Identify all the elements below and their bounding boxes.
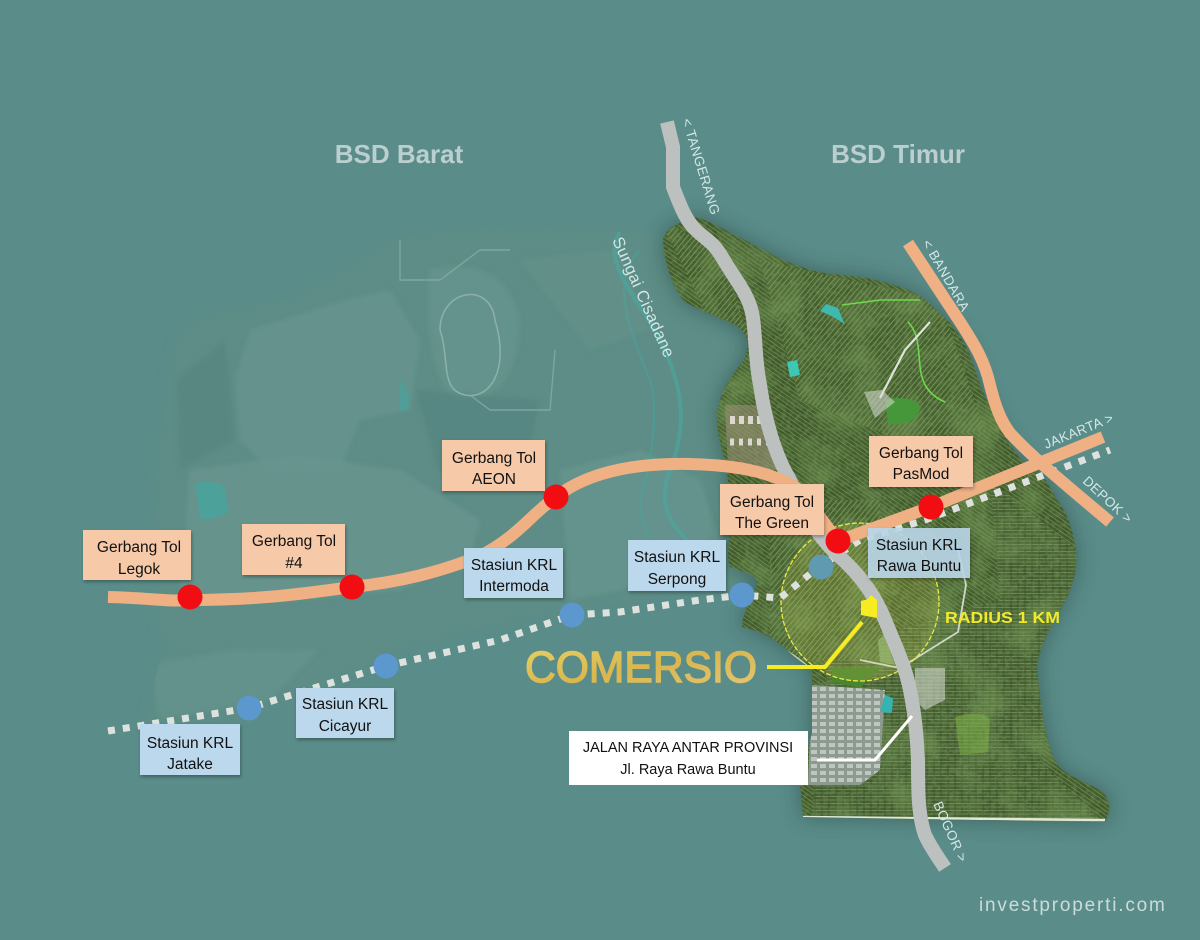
road: Tangerang to Bogor grey road xyxy=(667,122,945,868)
toll gate: PasMod: PasMod xyxy=(893,466,949,483)
callout: Jalan Raya Antar Provinsi xyxy=(569,731,808,785)
station: Rawa Buntu xyxy=(808,528,970,580)
toll gate: Legok: Gerbang Tol xyxy=(97,539,181,556)
toll gate: Legok xyxy=(83,530,202,610)
station: Cicayur: Cicayur xyxy=(319,718,371,735)
callout: Jalan Raya Antar Provinsi: Jl. Raya Rawa Buntu xyxy=(620,762,756,778)
road: toll road Bandara xyxy=(908,243,1110,522)
toll gate: #4 xyxy=(242,524,364,600)
toll gate: #4: #4 xyxy=(285,555,303,572)
toll gate: PasMod: Gerbang Tol xyxy=(879,445,963,462)
station: Serpong: Serpong xyxy=(648,571,706,588)
station: Jatake: Stasiun KRL xyxy=(147,735,233,752)
station: Rawa Buntu: Stasiun KRL xyxy=(876,537,962,554)
label: Jakarta direction: JAKARTA > xyxy=(1042,410,1116,452)
toll gate: The Green: Gerbang Tol xyxy=(730,494,814,511)
icon: project site marker xyxy=(861,595,877,618)
toll gate: PasMod xyxy=(869,436,973,520)
station: Cicayur xyxy=(296,654,398,738)
pointer: Comersio to project site xyxy=(767,622,862,667)
toll gate: The Green xyxy=(720,484,850,554)
station: Jatake: Jatake xyxy=(167,756,213,773)
station: Intermoda: Intermoda xyxy=(479,578,549,595)
panel: BSD Timur land (detailed green east area) xyxy=(650,200,1120,840)
station: Intermoda: Stasiun KRL xyxy=(471,557,557,574)
station: Serpong xyxy=(628,540,754,608)
station: Rawa Buntu: Rawa Buntu xyxy=(877,558,961,575)
watermark: investproperti.com xyxy=(979,895,1167,916)
toll gate: AEON: AEON xyxy=(472,471,516,488)
label: Sungai Cisadane: Sungai Cisadane xyxy=(608,234,678,361)
toll gate: The Green: The Green xyxy=(735,515,809,532)
callout: Jalan Raya Antar Provinsi: JALAN RAYA ANTAR PROVINSI xyxy=(583,740,793,756)
station: Cicayur: Stasiun KRL xyxy=(302,696,388,713)
toll gate: Legok: Legok xyxy=(118,561,160,578)
station: Jatake xyxy=(140,696,262,775)
road: KRL railway line xyxy=(108,450,1110,731)
label: Depok direction: DEPOK > xyxy=(1080,473,1135,526)
label: radius 1 km: RADIUS 1 KM xyxy=(945,610,1060,627)
toll gate: AEON: Gerbang Tol xyxy=(452,450,536,467)
radius circle xyxy=(781,523,939,681)
label: Tangerang direction: < TANGERANG xyxy=(679,116,723,217)
station: Serpong: Stasiun KRL xyxy=(634,549,720,566)
station: Intermoda xyxy=(464,548,584,628)
heading: BSD Timur: BSD Timur xyxy=(831,139,965,169)
toll gate: #4: Gerbang Tol xyxy=(252,533,336,550)
label: Bandara direction: < BANDARA xyxy=(919,237,973,314)
logo: Comersio: COMERSIO xyxy=(525,643,757,692)
heading: BSD Barat: BSD Barat xyxy=(335,139,464,169)
toll gate: AEON xyxy=(442,440,568,510)
label: Bogor direction: BOGOR > xyxy=(930,799,970,864)
road: main toll road west to east xyxy=(108,437,1103,601)
panel: BSD Barat land (faded west area) xyxy=(145,227,745,725)
pointer: callout to road xyxy=(817,716,912,760)
